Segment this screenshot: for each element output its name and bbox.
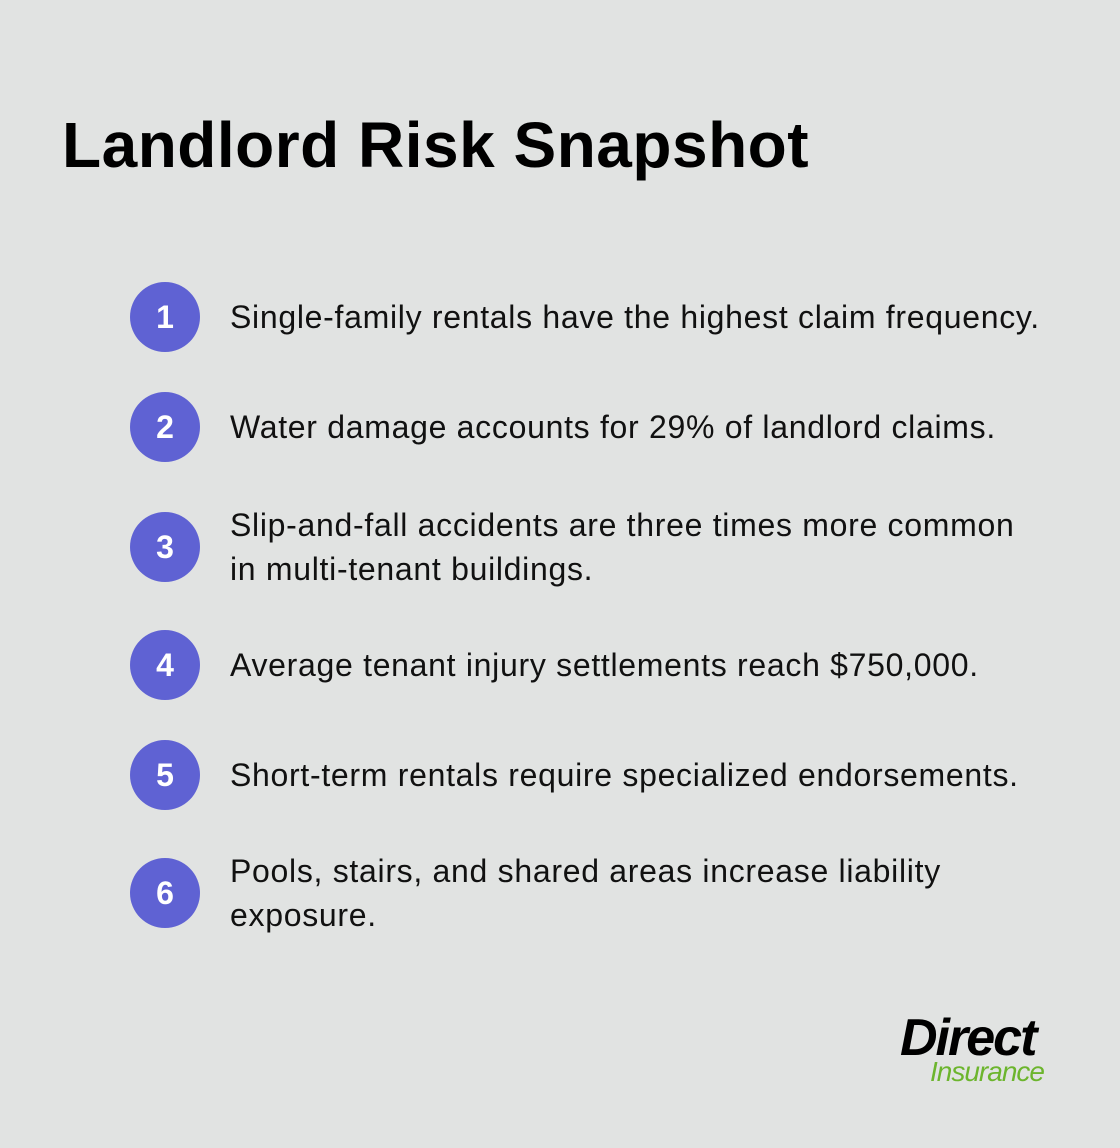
item 6 <box>130 853 941 933</box>
item 6: exposure. <box>230 897 377 933</box>
logo: Insurance <box>930 1056 1044 1087</box>
item 3 <box>130 507 1014 587</box>
item 6: 6 <box>156 875 174 911</box>
item 2 <box>130 392 996 462</box>
item 5: Short-term rentals require specialized endorsements. <box>230 757 1019 793</box>
item 6: Pools, stairs, and shared areas increase liability <box>230 853 941 889</box>
item 3: Slip-and-fall accidents are three times more common <box>230 507 1014 543</box>
item 2: 2 <box>156 409 174 445</box>
item 4: Average tenant injury settlements reach $750,000. <box>230 647 979 683</box>
item 1: Single-family rentals have the highest claim frequency. <box>230 299 1040 335</box>
item 5 <box>130 740 1019 810</box>
item 3: in multi-tenant buildings. <box>230 551 593 587</box>
item 3: 3 <box>156 529 174 565</box>
logo <box>900 1009 1044 1087</box>
item 1: 1 <box>156 299 174 335</box>
item 1 <box>130 282 1040 352</box>
item 2: Water damage accounts for 29% of landlord claims. <box>230 409 996 445</box>
logo: Direct <box>900 1009 1035 1067</box>
title: Landlord Risk Snapshot <box>62 109 809 181</box>
item 5: 5 <box>156 757 174 793</box>
item 4: 4 <box>156 647 174 683</box>
item 4 <box>130 630 979 700</box>
